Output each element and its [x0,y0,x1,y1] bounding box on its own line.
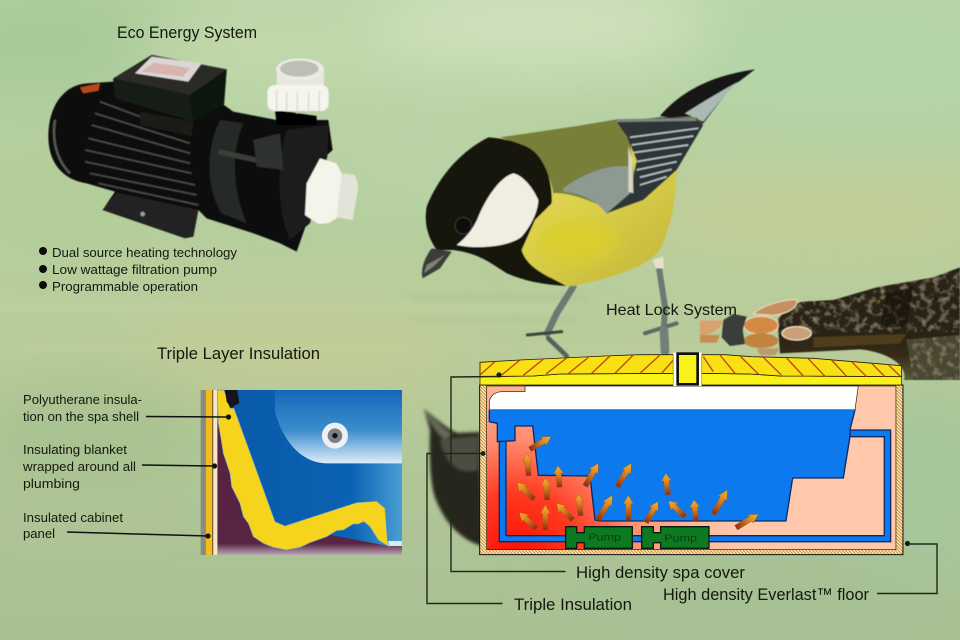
cabinet layers [201,390,206,555]
leader: high density Everlast floor: High density Everlast™ floor [663,585,869,604]
log with mushrooms [700,267,960,380]
grey flank [563,166,637,214]
pump two [642,527,709,548]
leader: high density spa cover [451,372,745,582]
bullet list: Programmable operation [52,279,198,294]
yellow body [480,117,703,286]
eye [455,217,472,234]
label: insulating blanket [22,442,217,491]
black seal [225,390,239,407]
leader: high density Everlast floor [663,541,937,604]
tail [660,69,755,123]
bird: great tit [422,69,755,356]
leader: triple insulation [427,451,632,614]
label: insulated cabinet panel [23,510,211,541]
title: Eco Energy System: Eco Energy System [117,23,257,42]
beak [422,248,452,278]
motor end cap highlight [54,120,70,173]
yellow blanket [217,390,389,550]
label: polyurethane insulation: Polyutherane insula- [23,392,142,407]
pump one: Pump [588,533,622,544]
purple base [217,390,402,555]
pump two: Pump [664,534,698,545]
title: Triple Layer Insulation: Triple Layer Insulation [157,344,320,363]
bullet list [39,245,238,294]
pump photo [48,55,358,252]
motor fins [85,102,198,205]
label: insulating blanket: Insulating blanket [23,442,127,457]
white cheek [457,173,538,247]
heat lock spa diagram [480,353,903,555]
leader: triple insulation: Triple Insulation [514,595,632,614]
olive back [500,119,637,210]
jet [322,423,348,449]
cabinet wall [480,385,903,555]
log reflection in water [778,330,960,380]
label: polyurethane insulation: tion on the spa shell [23,409,139,424]
mushrooms [753,299,797,315]
spa cover lid [480,353,902,386]
label: insulating blanket: wrapped around all [22,459,136,474]
pump one [566,527,632,548]
bullet list: Low wattage filtration pump [52,262,217,277]
pump head [210,120,247,223]
blue water pipe [499,430,891,542]
label: insulating blanket: plumbing [23,476,80,491]
heat arrows [514,432,761,532]
label: insulated cabinet panel: panel [23,526,55,541]
heated interior [487,386,896,550]
insulation cross-section diagram [201,390,402,555]
leader: high density spa cover: High density spa cover [576,563,745,582]
terminal box [140,112,193,136]
wing [607,117,703,213]
black head and bib [426,137,567,286]
pump silhouette [48,55,333,252]
tub highlight [275,390,402,463]
right white union [305,158,358,224]
bullet list: Dual source heating technology [52,245,238,260]
bird legs [527,263,677,356]
brighter belly [537,220,617,263]
spa water [489,410,855,521]
blue tub [234,390,402,546]
pump foot [103,193,198,238]
reflection of bird on water [424,409,482,546]
label: polyurethane insulation [23,392,231,424]
title: Heat Lock System: Heat Lock System [606,302,737,319]
white air gap [489,386,858,410]
top white union [277,69,324,93]
label: insulated cabinet panel: Insulated cabinet [23,510,123,525]
